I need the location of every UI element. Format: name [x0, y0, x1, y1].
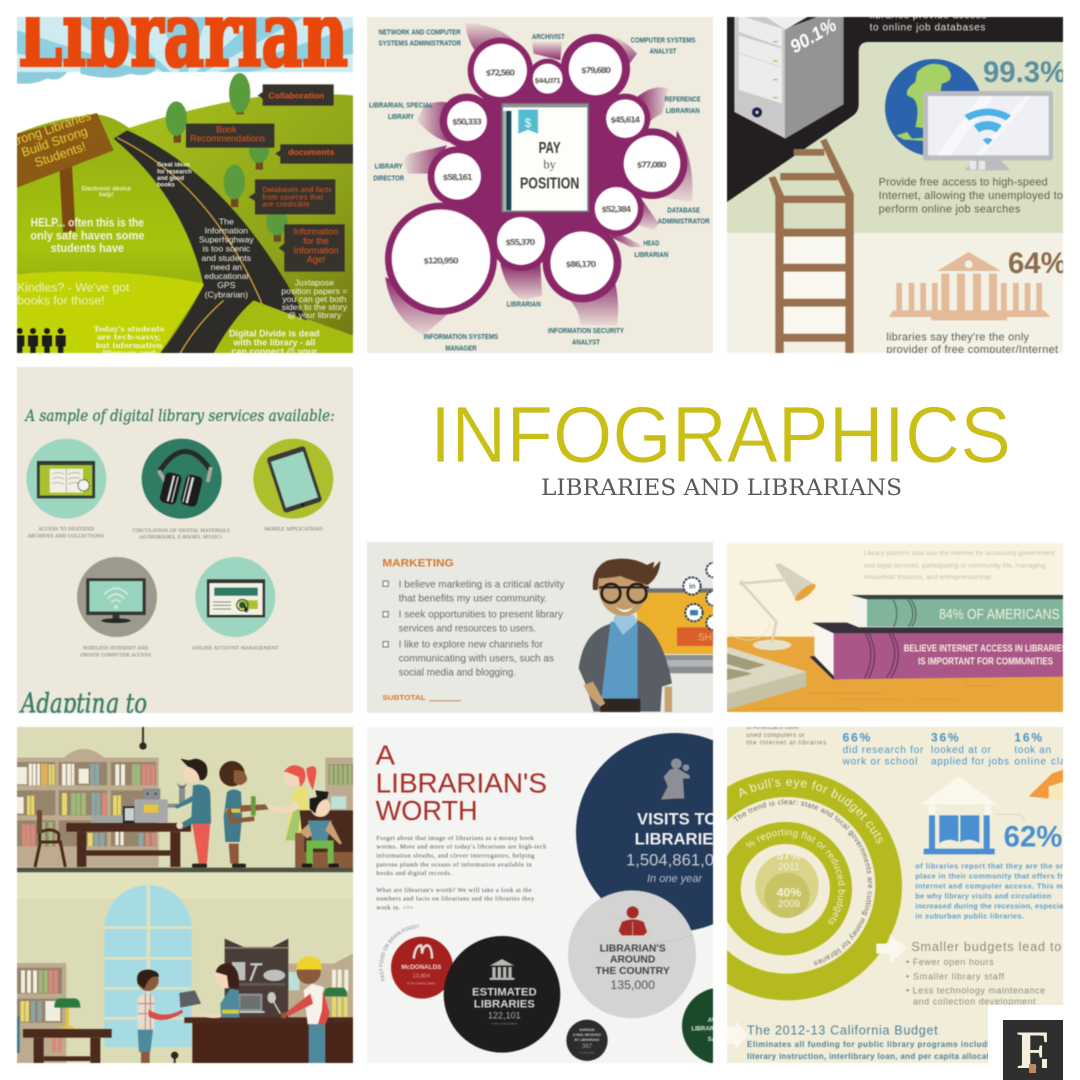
character with glasses	[579, 559, 672, 712]
bubble: mcdonalds	[391, 937, 453, 999]
text: smaller budgets: • Smaller library staff	[906, 971, 1004, 981]
road and hill captions: sides to the story	[282, 302, 348, 312]
bubble: librarians around the country: AROUND	[610, 955, 656, 966]
panel: librarian road illustration	[16, 16, 354, 354]
checkbox list: communicating with users, such as	[399, 654, 554, 665]
road and hill captions: only safe haven some	[30, 228, 144, 242]
position labels: DATABASE	[667, 205, 700, 214]
fading label tails	[385, 23, 693, 335]
character: boy with laptop	[137, 970, 183, 1063]
chart labels: 2011 and 2009: 2009	[778, 899, 801, 910]
text: library patrons: household finances, and entrepreneurship.	[864, 574, 993, 581]
icon: digitized archives	[26, 439, 106, 519]
logo badge	[988, 1005, 1080, 1080]
road and hill captions: (Cybrarian)	[205, 289, 248, 299]
text: online job databases	[870, 11, 986, 33]
book: pay by position: by	[543, 158, 557, 172]
callout: information age: Information	[293, 227, 339, 237]
character: boy with wrench	[174, 759, 211, 868]
callout: databases	[249, 179, 335, 214]
character: construction worker	[281, 956, 330, 1063]
bubble: estimated libraries: LIBRARIES	[474, 998, 535, 1010]
checkbox list: I believe marketing is a critical activity	[399, 580, 564, 591]
desk	[727, 637, 1063, 713]
text: smaller budgets: and collection development	[913, 997, 1036, 1007]
icon: library with open book	[921, 776, 1024, 854]
road and hill captions: Electronic device	[82, 186, 132, 192]
checkbox list: I seek opportunities to present library	[399, 610, 563, 621]
callout: Collaboration: Collaboration	[268, 90, 324, 100]
position labels: MANAGER	[445, 343, 477, 352]
road	[114, 130, 307, 353]
ceiling lamp	[139, 727, 147, 750]
icon: row of people	[15, 328, 66, 353]
road and hill captions: Kindles? - We've got	[17, 280, 130, 294]
road and hill captions: @ your library	[287, 310, 342, 320]
icon: wireless monitor	[77, 557, 157, 637]
road and hill captions: position papers =	[281, 286, 347, 296]
position labels: INFORMATION SECURITY	[548, 326, 624, 335]
bubble: librarians around the country: THE COUNTRY	[596, 966, 670, 977]
text: only provider: libraries say they're the only	[886, 331, 1030, 343]
caption: digital materials	[133, 528, 230, 540]
curved headings: % reporting flat or reduced budgets	[745, 828, 846, 926]
heading: a librarian's worth	[376, 739, 547, 826]
panel: pay by position bubble chart	[367, 17, 713, 353]
text: california budget	[747, 1023, 1008, 1061]
book: pay by position: POSITION	[520, 175, 579, 192]
road and hill captions: but information	[96, 341, 162, 350]
intro paragraph: information sleuths, and clever interrogators, helping	[376, 852, 535, 859]
text: library patrons: and legal services, participating in community life, managing	[864, 562, 1046, 569]
book: purple	[810, 623, 1067, 679]
caption: wireless	[80, 646, 151, 659]
laptop screen with social gears	[637, 563, 721, 673]
road and hill captions: are tech-savvy,	[97, 333, 161, 342]
caption: digital materials: CIRCULATION OF DIGITAL MATERIALS	[133, 528, 230, 534]
stat: 62%: 62%	[1004, 820, 1062, 853]
icon: keyboard	[727, 647, 806, 710]
road and hill captions: GPS	[217, 280, 236, 290]
callout: databases: are credicible	[262, 200, 310, 209]
big bookshelf	[17, 749, 159, 867]
icon: white arrow lower	[724, 1020, 748, 1050]
road and hill captions: for research	[157, 169, 192, 175]
road and hill captions: is too scenic	[203, 244, 251, 254]
top stats: looked at or	[931, 745, 992, 756]
position labels: ARCHIVIST	[532, 32, 565, 41]
icon: headphones	[142, 439, 222, 519]
callout: information age: Age!	[307, 255, 325, 265]
tool cabinet	[225, 939, 288, 1020]
bubble: estimated libraries: In the United states	[491, 1022, 518, 1026]
lower ceiling lamp	[171, 1052, 178, 1063]
top stats: applied for jobs	[931, 756, 1009, 767]
character: woman with book	[219, 761, 269, 868]
icon: globe	[885, 59, 982, 156]
chart labels: 2011 and 2009	[777, 848, 801, 910]
ring circles	[385, 34, 687, 315]
position labels: NETWORK AND COMPUTER	[379, 27, 461, 36]
text: library patrons: Library patrons also use the internet for accessing government	[864, 550, 1055, 557]
checkbox list: I like to explore new channels for	[399, 640, 544, 651]
road and hill captions: students have	[51, 241, 124, 255]
intro paragraph: work in.	[376, 904, 401, 911]
bubble: librarians salary	[682, 988, 759, 1064]
salary values: $120,950	[423, 255, 459, 265]
position labels	[369, 27, 710, 352]
bull's eye rings	[685, 784, 889, 987]
position labels: ANALYST	[572, 337, 600, 346]
signpost: Students!	[33, 139, 88, 170]
text: free access: perform online job searches	[879, 204, 1021, 216]
road and hill captions: Juxtapose	[295, 278, 334, 288]
sky	[17, 17, 353, 127]
road and hill captions: books for those!	[17, 293, 105, 307]
position labels: HEAD	[643, 239, 660, 248]
lower left bookshelf with lamp and table	[17, 963, 112, 1063]
road and hill captions: help!	[99, 192, 114, 198]
salary values: $52,384	[601, 204, 632, 214]
callout: databases: from sources that	[262, 192, 323, 201]
intro paragraph: What are librarian's worth? We will take a look at the	[376, 887, 532, 894]
road and hill captions: Great ideas	[157, 163, 190, 169]
text: only provider	[886, 331, 1058, 356]
caption: digital materials: (AUDIOBOOKS, E-BOOKS, MUSIC)	[139, 533, 222, 540]
character: red-haired woman	[268, 765, 316, 840]
bubble: mcdonalds: McDONALDS	[401, 964, 441, 971]
salary values: $72,560	[486, 67, 515, 77]
road and hill captions: Digital Divide is dead	[229, 328, 320, 338]
bubble: librarians around the country: LIBRARIAN'S	[600, 943, 666, 954]
desk and chair	[35, 810, 191, 867]
bubble: estimated libraries	[444, 936, 560, 1053]
laptop screen with social gears: in	[689, 582, 696, 591]
book: pay by position: PAY	[539, 140, 561, 157]
ladder	[769, 139, 854, 353]
text: library patrons	[864, 550, 1055, 581]
callout: databases: Databases and facts	[262, 185, 332, 194]
salary values: $50,333	[452, 116, 482, 126]
position labels: LIBRARIAN, SPECIAL	[369, 101, 433, 110]
curved headings: A bull's eye for budget cuts	[739, 778, 884, 844]
bubble: estimated libraries: ESTIMATED	[472, 986, 537, 998]
top stats: did research for	[843, 745, 924, 756]
gadgets on desk	[91, 783, 187, 823]
road and hill captions: and students	[202, 253, 252, 263]
caption: archives: ACCESS TO DIGITIZED	[37, 527, 94, 533]
road and hill captions: you can get both	[282, 294, 347, 304]
text: smaller budgets: • Less technology maintenance	[906, 985, 1045, 995]
heading: a librarian's worth: LIBRARIAN'S	[376, 767, 547, 798]
chart labels: 2011 and 2009: 40%	[777, 885, 801, 899]
callout: Book Recommendations: Recommendations	[190, 134, 266, 144]
intro paragraph: patrons plumb the oceans of information available in	[376, 861, 532, 868]
caption: archives: ARCHIVES AND COLLECTIONS	[26, 533, 104, 539]
top stats: used computers or	[746, 732, 805, 739]
position labels: SYSTEMS ADMINISTRATOR	[378, 38, 461, 47]
signpost: Build Strong	[20, 124, 89, 160]
intro paragraph: books and digital records.	[376, 870, 452, 877]
intro paragraph: Forget about that image of librarians as a mousy book	[376, 835, 534, 842]
top stats	[746, 724, 1078, 767]
road and hill captions: and good	[157, 176, 184, 182]
panel: library scene illustration	[17, 727, 353, 1063]
intro paragraph: numbers and facts on librarians and the libraries they	[376, 896, 535, 903]
road and hill captions: Today's students	[94, 324, 164, 333]
position labels: LIBRARIAN	[507, 299, 541, 308]
caption: wireless: WIRELESS INTERNET AND	[83, 646, 148, 652]
laptop screen with social gears: SH	[698, 633, 712, 644]
callout: information age	[279, 224, 345, 272]
position labels: LIBRARY	[388, 112, 414, 121]
bubble: mcdonalds: 12,804	[413, 973, 430, 979]
signpost	[4, 109, 114, 232]
icon: online account window	[195, 557, 275, 637]
panel: digital library services	[17, 367, 353, 713]
road and hill captions: need an	[211, 262, 242, 272]
bubble: average emails: BY LIBRARIANS	[575, 1038, 599, 1042]
salary values: $79,680	[581, 65, 611, 75]
caption: account: ONLINE ACCOUNT MANAGEMENT	[192, 646, 279, 652]
character: boy on sofa	[295, 790, 353, 868]
salary values	[423, 65, 667, 269]
checkbox list: social media and blogging.	[399, 667, 516, 678]
road and hill captions: Superhighway	[199, 235, 254, 245]
road and hill captions	[17, 163, 348, 358]
logo badge: F	[1016, 1020, 1050, 1080]
text: online job databases: to online job databases	[870, 22, 985, 33]
salary values: $58,161	[443, 172, 473, 182]
bubble: average emails: AVERAGE	[579, 1028, 595, 1032]
text: california budget: The 2012-13 California Budget	[747, 1023, 938, 1037]
intro paragraph	[376, 835, 547, 911]
salary values: $77,080	[637, 160, 667, 170]
bubble: average emails	[566, 1020, 608, 1061]
top stats: work or school	[842, 756, 917, 767]
position labels: REFERENCE	[665, 95, 701, 104]
bubble: average emails: in one year	[580, 1050, 594, 1054]
title: INFOGRAPHICS: LIBRARIES AND LIBRARIANS	[541, 476, 902, 501]
salary values: $55,370	[505, 237, 536, 247]
text: smaller budgets: Smaller budgets lead to	[911, 940, 1061, 954]
top stats: 36%	[931, 731, 959, 745]
bubble: mcdonalds: in the United states	[407, 981, 436, 985]
callout: Collaboration	[258, 84, 334, 106]
text: california budget: literary instruction, interlibrary loan, and per capita allocations	[747, 1052, 1008, 1061]
icon: library building	[889, 252, 1050, 320]
back hills	[17, 94, 353, 353]
heading: marketing: MARKETING	[382, 558, 454, 570]
subtotal	[382, 693, 461, 702]
position labels: INFORMATION SYSTEMS	[424, 332, 498, 341]
text: smaller budgets	[906, 940, 1061, 1007]
bubble: librarians around the country	[568, 890, 696, 1018]
road and hill captions: HELP... often this is the	[31, 215, 144, 229]
top stats: 66%	[843, 731, 871, 745]
panel: marketing checklist	[367, 542, 713, 713]
caption: mobile applications: MOBILE APPLICATIONS	[264, 527, 323, 533]
trees	[166, 73, 288, 242]
callout: Book Recommendations: Book	[216, 124, 237, 134]
backgrounds	[727, 17, 1063, 353]
bubble: average emails: E-MAIL RECEIVED	[573, 1033, 602, 1037]
position labels: COMPUTER SYSTEMS	[631, 35, 695, 44]
center blob	[441, 70, 652, 264]
text: free access: Internet, allowing the unemployed to	[879, 190, 1063, 202]
checkbox list	[383, 580, 564, 678]
position labels: LIBRARIAN	[634, 250, 669, 259]
text: free access: Provide free access to high-speed	[879, 176, 1048, 188]
text: california budget: Eliminates all funding for public library programs including	[747, 1040, 1000, 1049]
panel: budget bull's eye	[727, 727, 1063, 1063]
text: free access	[879, 176, 1063, 216]
chart labels: 2011 and 2009: 57%	[777, 848, 801, 862]
chart labels: 2011 and 2009: 2011	[778, 862, 800, 873]
callout: information age: Information	[293, 245, 339, 255]
bubble: librarians around the country: 135,000	[610, 978, 655, 992]
text: only place: be why library visits and circulation	[915, 892, 1052, 901]
position labels: LIBRARY	[375, 162, 403, 171]
right lower bookshelf	[289, 954, 353, 1020]
road and hill captions: The	[219, 216, 234, 226]
icon: tablet	[253, 439, 333, 519]
salary values: $45,614	[610, 114, 641, 124]
bubble: visits to libraries: In one year	[647, 873, 703, 885]
callout: documents: documents	[288, 147, 335, 157]
book: pay by position: $	[525, 116, 532, 130]
character: librarian	[215, 963, 240, 1018]
intro paragraph: worms. More and more of today's librarians are high-tech	[376, 844, 547, 851]
curved caption: fast food or brain food: FAST FOOD OR BRAIN FOOD?	[378, 924, 420, 982]
panel: internet access books	[727, 543, 1063, 712]
icon: desk lamp	[727, 563, 818, 650]
caption: archives	[26, 527, 104, 539]
callout: information age: for the	[303, 236, 329, 246]
top stats: the Internet at libraries	[746, 740, 826, 747]
top stats: 16%	[1014, 731, 1042, 745]
callout: documents	[275, 144, 353, 164]
book: pay by position	[501, 103, 589, 212]
bubble: visits to libraries	[576, 733, 775, 932]
bubble: average emails: 367	[582, 1044, 593, 1050]
salary values: $86,170	[566, 259, 597, 269]
walls and floor	[17, 727, 353, 1063]
top stats: took an	[1014, 745, 1051, 756]
icon: server tower	[734, 7, 844, 139]
subtotal: SUBTOTAL	[382, 693, 426, 702]
panel: free internet statistics	[727, 17, 1063, 353]
checkbox list: that benefits my user community.	[399, 593, 547, 604]
white value bubbles	[392, 42, 680, 308]
text: smaller budgets: • Fewer open hours	[906, 957, 994, 967]
book: green	[851, 595, 1063, 627]
laptop handover	[179, 990, 226, 1018]
road and hill captions: with the library - all	[232, 337, 315, 347]
road and hill captions: books	[157, 182, 175, 188]
bubble: estimated libraries: 122,101	[488, 1011, 521, 1021]
checkbox list: services and resources to users.	[399, 624, 536, 635]
salary values: $44,071	[534, 76, 561, 85]
icon: wifi monitor	[923, 91, 1053, 170]
position labels: LIBRARIAN	[666, 106, 700, 115]
right bookshelf	[325, 758, 353, 811]
text: only place: in suburban public libraries.	[915, 912, 1024, 921]
panel: a librarian's worth	[367, 727, 713, 1063]
intro paragraph: >>>	[403, 905, 414, 911]
icon: paper airplane corner	[1029, 770, 1063, 802]
road and hill captions: Information	[205, 226, 248, 236]
icon: white arrow	[876, 934, 907, 964]
caption: wireless: ONSITE COMPUTER ACCESS	[80, 653, 151, 659]
position labels: ANALYST	[650, 47, 677, 56]
heading: a librarian's worth: A	[376, 739, 395, 770]
text: only place	[915, 862, 1073, 921]
callout: Book Recommendations	[186, 124, 274, 148]
librarian counter	[184, 1017, 353, 1023]
curved headings: The trend is clear: state and local governments are cutting money for libraries	[732, 798, 872, 966]
road and hill captions: educational	[204, 271, 249, 281]
position labels: DIRECTOR	[373, 173, 404, 182]
arched window	[104, 884, 192, 1047]
heading: a librarian's worth: WORTH	[376, 795, 478, 826]
